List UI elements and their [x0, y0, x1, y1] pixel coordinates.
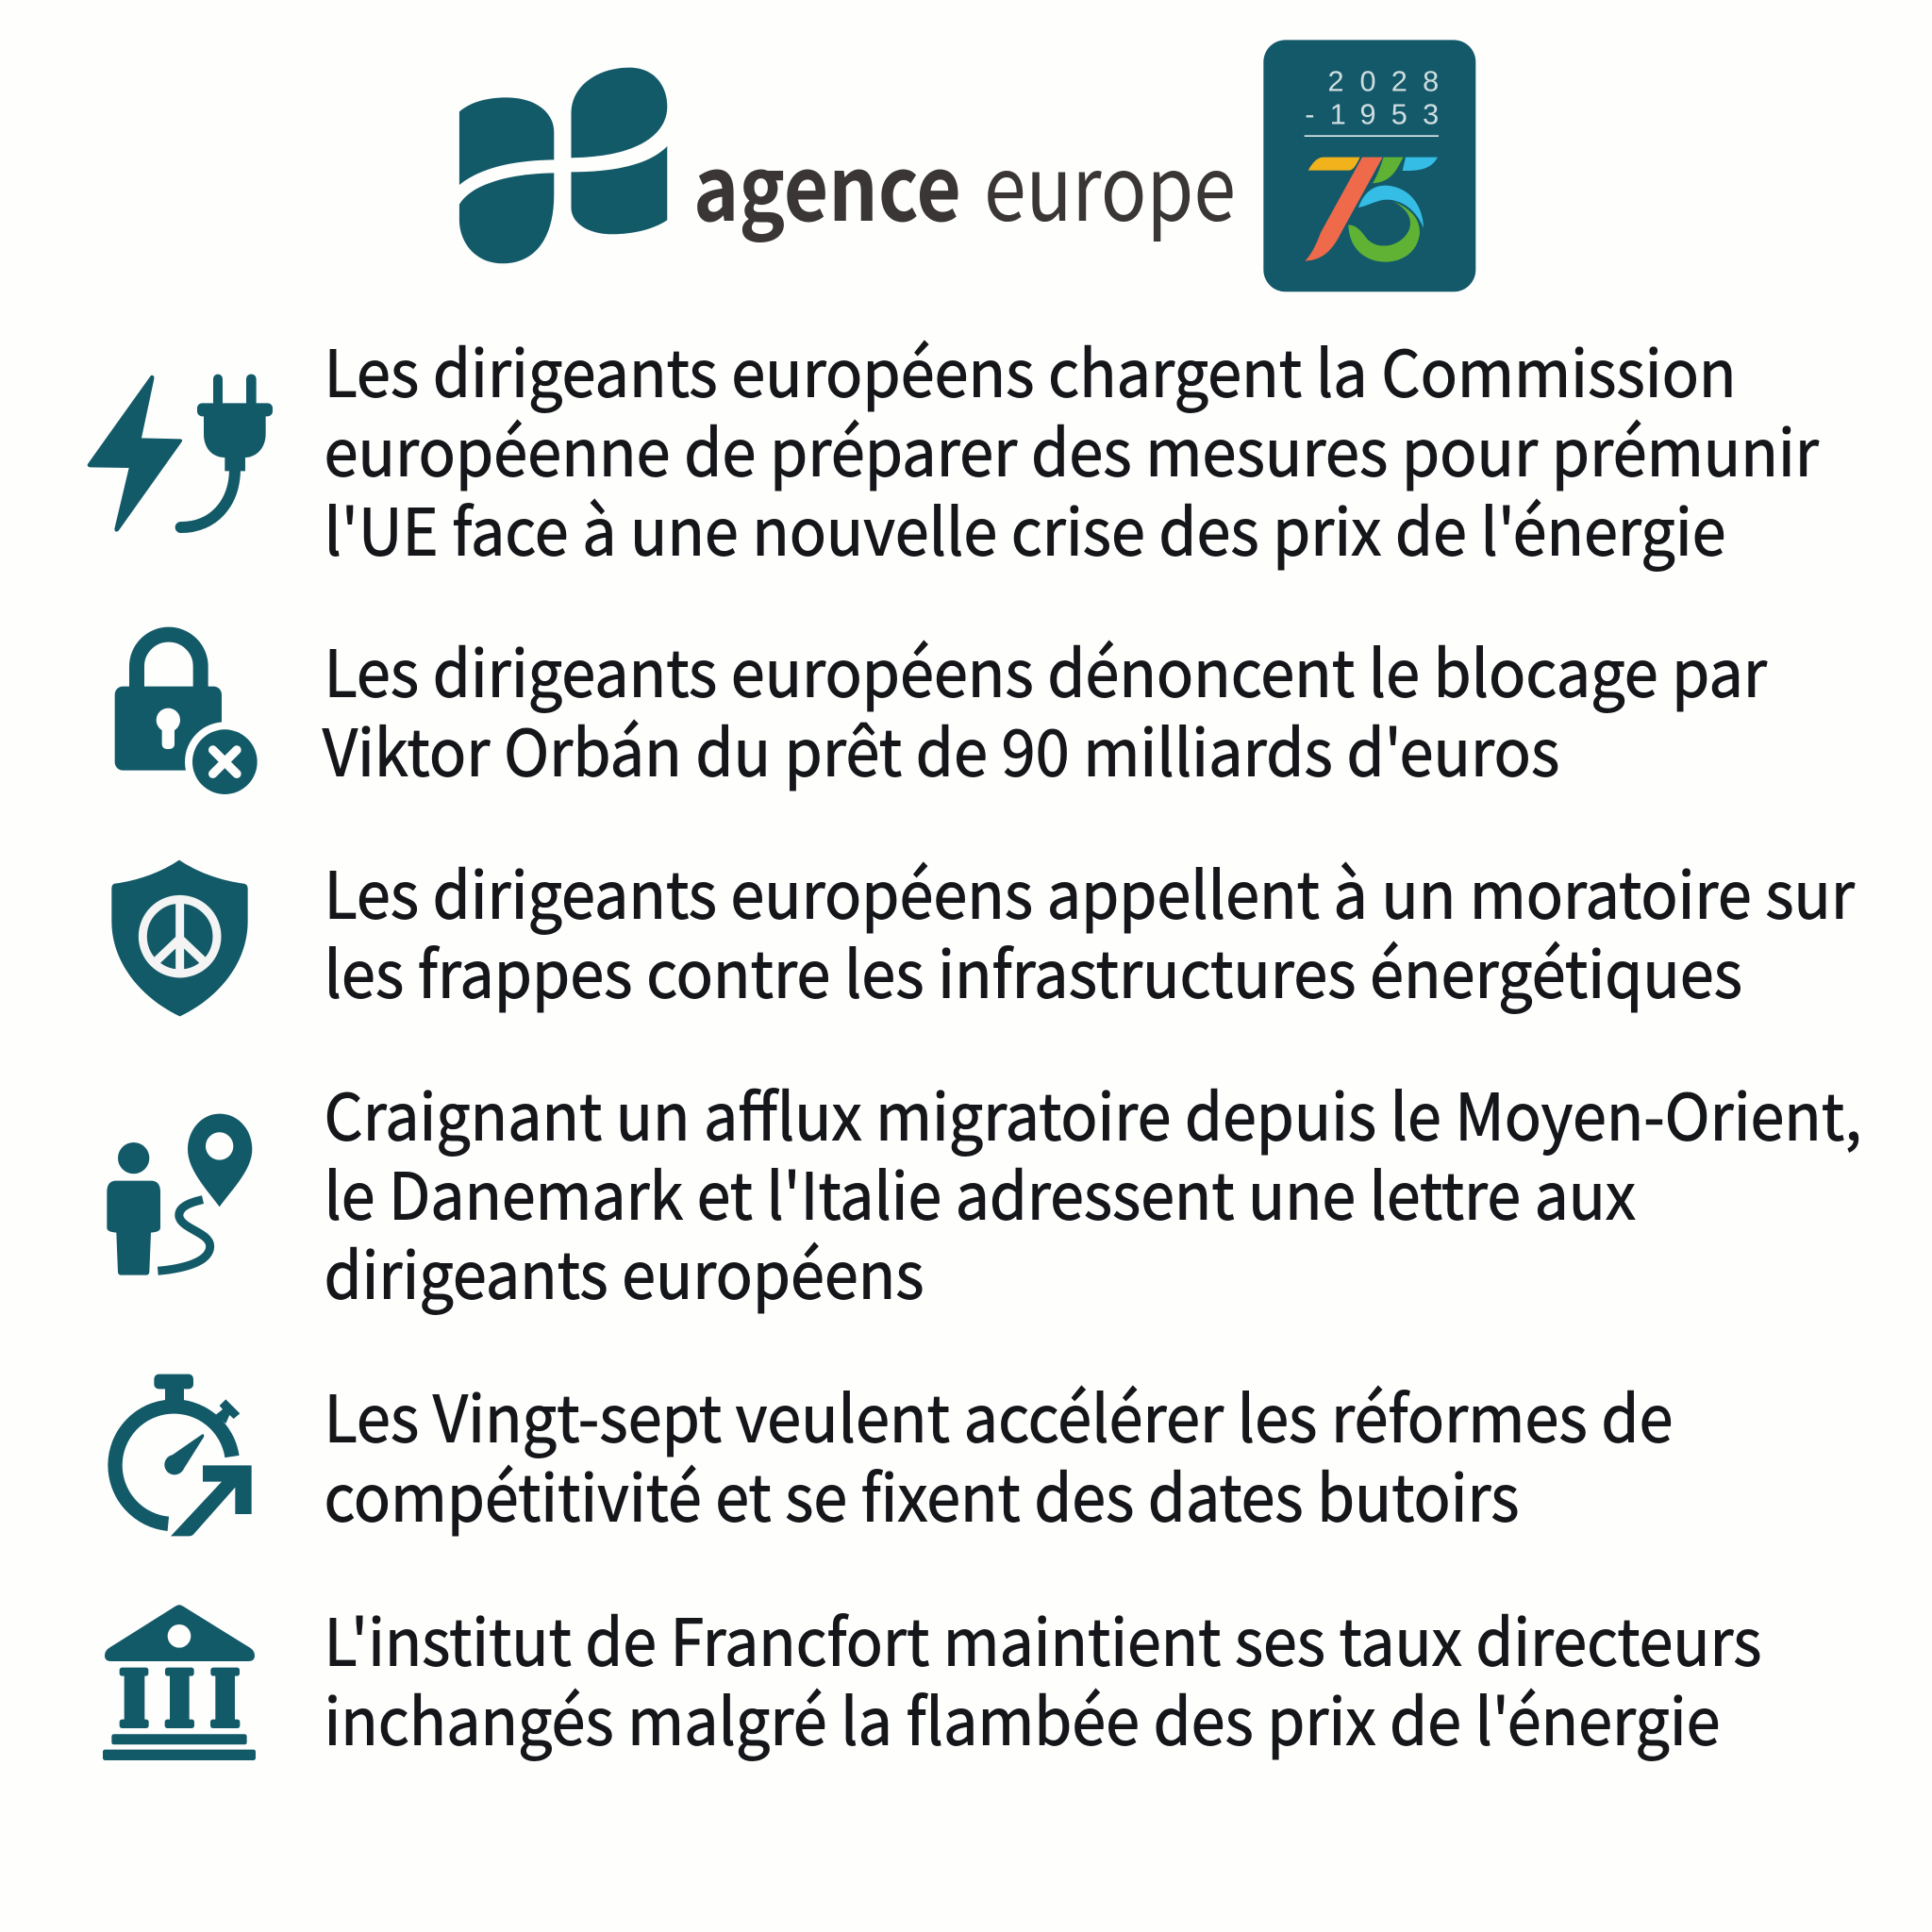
year subtraction: 2028 — [1327, 66, 1439, 98]
text: energy prices: Les dirigeants européens chargent la Commission — [325, 323, 1736, 415]
text: migration: Craignant un afflux migratoire depuis le Moyen-Orient, — [325, 1066, 1862, 1158]
number 75 — [1305, 158, 1438, 262]
item 2: loan blockage — [115, 623, 1768, 802]
badge: 75 years — [1263, 40, 1475, 291]
header: logos — [459, 40, 1475, 291]
item 3: moratorium — [111, 843, 1856, 1017]
icon: bank building — [103, 1605, 256, 1760]
text: competitiveness: Les Vingt-sept veulent accélérer les réformes de — [325, 1368, 1674, 1460]
logo mark: agence europe — [459, 68, 667, 263]
text: energy prices: l'UE face à une nouvelle crise des prix de l'énergie — [325, 481, 1726, 574]
text: loan blockage — [323, 623, 1768, 794]
text: competitiveness: compétitivité et se fixent des dates butoirs — [325, 1447, 1519, 1540]
text: competitiveness — [325, 1368, 1674, 1540]
text: loan blockage: Les dirigeants européens dénoncent le blocage par — [325, 623, 1768, 715]
year subtraction — [1305, 66, 1439, 131]
item 6: interest rates — [103, 1591, 1762, 1764]
text: migration: dirigeants européens — [325, 1224, 924, 1317]
icon: padlock with cross — [115, 635, 265, 802]
text: loan blockage: Viktor Orbán du prêt de 90 milliards d'euros — [323, 702, 1559, 794]
text: moratorium: Les dirigeants européens appellent à un moratoire sur — [325, 843, 1856, 938]
text: moratorium — [325, 843, 1856, 1017]
icon: person, path and map pin — [107, 1114, 252, 1275]
icon: stopwatch with rising arrow — [115, 1374, 252, 1536]
item 1: energy prices — [88, 323, 1820, 574]
icon: lightning and plug — [88, 375, 273, 532]
text: migration — [325, 1066, 1862, 1317]
text: energy prices: européenne de préparer des mesures pour prémunir — [325, 402, 1820, 494]
text: moratorium: les frappes contre les infrastructures énergétiques — [325, 923, 1742, 1017]
wordmark: agence europe — [693, 118, 1236, 247]
text: migration: le Danemark et l'Italie adressent une lettre aux — [325, 1145, 1636, 1238]
year subtraction: -1953 — [1305, 99, 1439, 131]
wordmark: agence europe: europe — [984, 118, 1236, 247]
item 5: competitiveness — [115, 1368, 1674, 1540]
text: energy prices — [325, 323, 1820, 574]
text: interest rates: L'institut de Francfort maintient ses taux directeurs — [325, 1591, 1762, 1685]
text: interest rates — [325, 1591, 1762, 1764]
icon: shield with peace sign — [111, 860, 248, 1016]
wordmark: agence europe: agence — [693, 118, 961, 247]
text: interest rates: inchangés malgré la flambée des prix de l'énergie — [325, 1670, 1721, 1764]
item 4: migration — [107, 1066, 1862, 1317]
